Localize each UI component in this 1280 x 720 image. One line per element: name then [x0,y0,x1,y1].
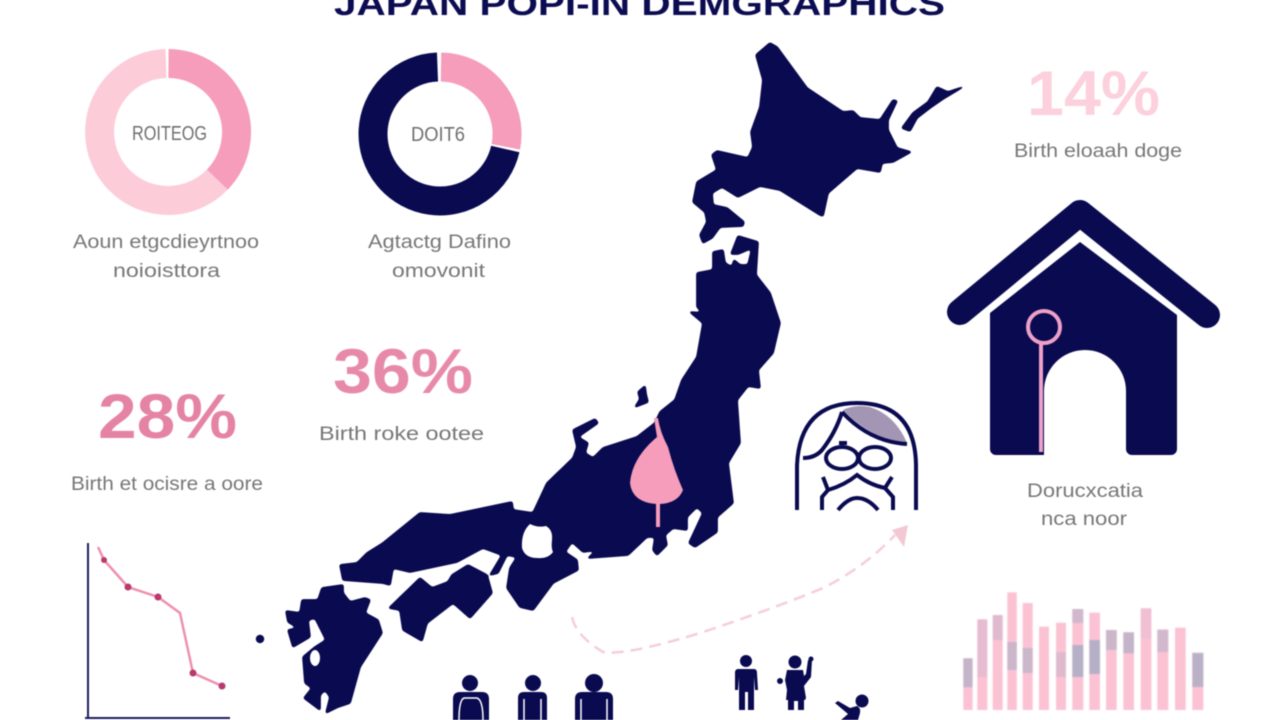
crawling child [835,694,868,720]
donut right caption: Agtactg Dafino [368,232,511,253]
pink droplet on map [630,418,683,527]
stat: 36% [319,337,484,445]
donut right caption [368,232,511,282]
stat: 36%: 36% [333,337,473,407]
Shikoku [389,565,492,641]
donut left caption [73,232,259,282]
Tsushima dot [256,636,264,642]
Lake Biwa [522,524,553,558]
stat: 14%: 14% [1027,59,1160,129]
stat: 28%: 28% [98,382,237,452]
figure with raised arm [777,656,814,710]
stat: 36%: Birth roke ootee [319,424,484,445]
house caption: Dorucxcatia [1027,481,1143,502]
person 1 [453,675,489,720]
stat: 14%: Birth eloaah doge [1014,141,1182,162]
bar chart [963,592,1203,710]
house caption: nca noor [1041,509,1128,530]
standing figure [735,655,758,710]
donut left caption: Aoun etgcdieyrtnoo [73,232,259,253]
stat: 28%: Birth et ocisre a oore [71,474,263,495]
stat: 14% [1014,59,1182,162]
donut right caption: omovonit [392,261,486,282]
map of Japan [256,43,963,713]
donut left caption: noioisttora [113,261,221,282]
people icons: family [735,655,868,720]
house caption [1027,481,1143,530]
stat: 28% [71,382,263,495]
panel: donut chart left: ROITEOG [132,123,207,145]
Hokkaido [693,43,911,243]
panel: donut chart left [100,64,237,200]
dashed arrow [572,525,908,653]
house icon [960,213,1207,455]
person 3 [575,674,613,720]
Sado island [635,386,648,407]
Honshu [340,236,780,610]
panel: donut chart right: DOIT6 [411,124,465,146]
panel: donut chart right [373,67,507,201]
Kyushu bay [310,650,320,666]
Kyushu [286,585,382,713]
line chart [85,543,230,718]
person 2 [518,675,547,720]
people icons: adults [453,674,613,720]
elderly face icon [797,403,916,510]
Kuril island [902,87,963,131]
